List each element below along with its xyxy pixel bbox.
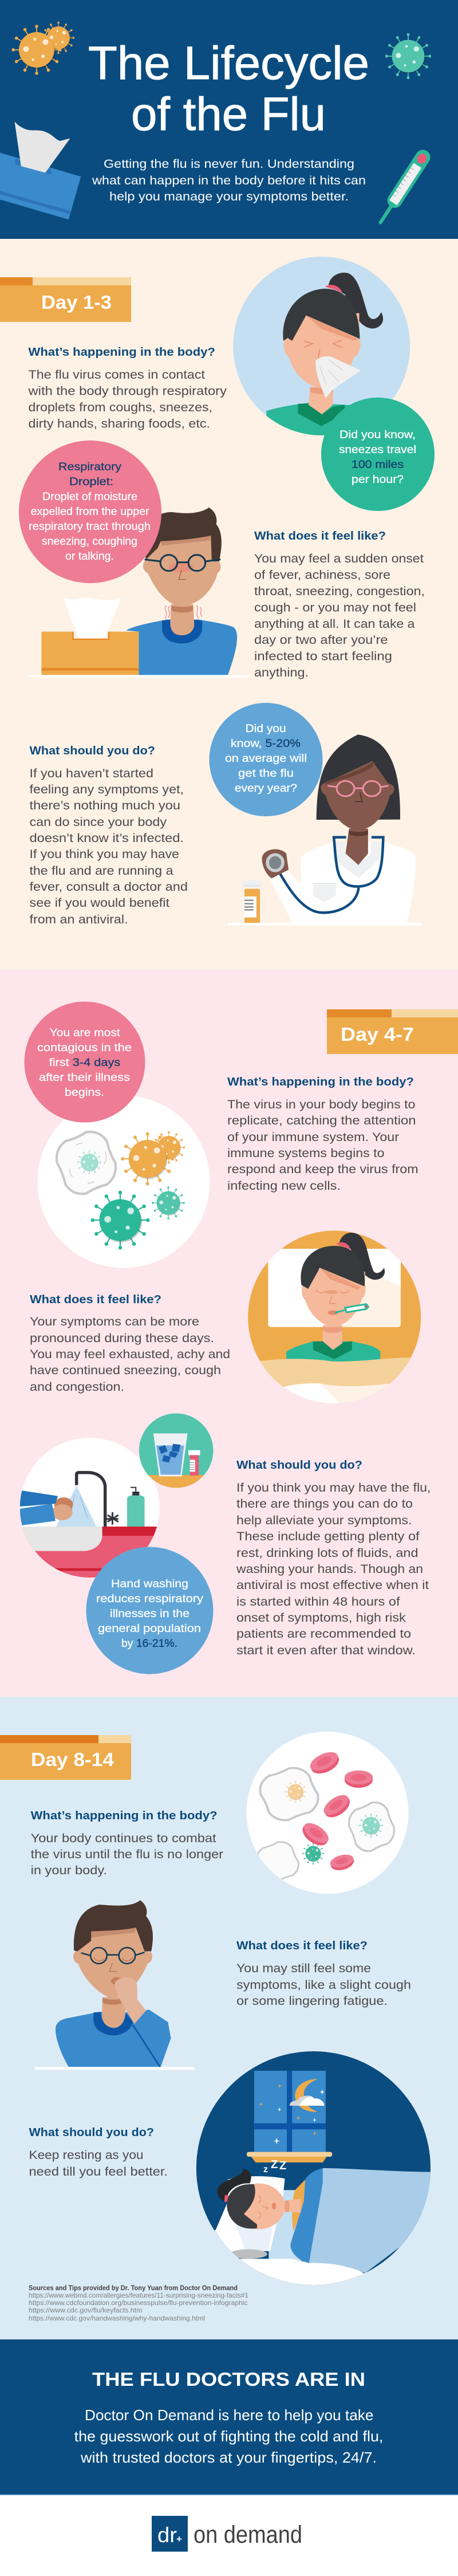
body text: what's happening, day 4-7: The virus in your body begins to [227, 1098, 416, 1111]
body text: what should you do, day 1-3: from an antiviral. [30, 913, 128, 926]
title [88, 37, 369, 140]
body text: what's happening, day 1-3: dirty hands, sharing foods, etc. [29, 418, 210, 431]
body text: what does it feel like, day 4-7: and congestion. [30, 1381, 124, 1394]
body text: what's happening, day 1-3: droplets from coughs, sneezes, [29, 401, 212, 414]
body text: what should you do, day 4-7: help alleviate your symptoms. [236, 1514, 412, 1527]
icon: thermometer [373, 147, 433, 228]
body text: what does it feel like, day 4-7: have continued sneezing, cough [30, 1364, 221, 1377]
illustration: woman sneezing [233, 257, 410, 447]
body text: what should you do, day 1-3: can do since your body [30, 816, 167, 829]
callout: sneezes: sneezes travel [339, 444, 416, 456]
body text: what does it feel like, day 1-3 [254, 552, 425, 679]
body text: what does it feel like, day 1-3: infected to start feeling [254, 650, 392, 663]
body text: what's happening, day 1-3 [27, 368, 227, 431]
body text: what does it feel like, day 8-14: You may still feel some [236, 1962, 371, 1975]
body text: what does it feel like, day 4-7 [30, 1315, 230, 1394]
illustration: viruses in white circle [38, 1095, 210, 1268]
heading: what's happening, day 1-3: What’s happening in the body? [29, 345, 215, 359]
callout: hand washing statistic: illnesses in the [110, 1608, 189, 1620]
sources: https://www.cdc.gov/flu/keyfacts.htm [29, 2306, 142, 2314]
body text: what does it feel like, day 1-3: of fever, achiness, sore [254, 569, 390, 582]
body text: what does it feel like, day 8-14: or some lingering fatigue. [236, 1995, 388, 2008]
callout: most contagious: contagious in the [37, 1042, 132, 1054]
body text: what should you do, day 8-14 [29, 2149, 168, 2178]
illustration: blood cells [246, 1732, 409, 1894]
heading: what does it feel like, day 8-14: What does it feel like? [236, 1939, 368, 1952]
body text: what should you do, day 4-7: start it even after that window. [236, 1644, 416, 1657]
body text: what should you do, day 1-3: If you think you may have [30, 848, 179, 861]
callout: respiratory droplet: sneezing, coughing [42, 536, 137, 548]
illustration: doctor [228, 734, 421, 926]
callout: most contagious [24, 1001, 145, 1123]
callout: respiratory droplet: Respiratory [58, 461, 122, 473]
body text: what's happening, day 4-7: of your immune system. Your [227, 1131, 399, 1144]
illustration: hand washing [18, 1438, 161, 1578]
body text: what's happening, day 4-7: replicate, catching the attention [227, 1114, 416, 1127]
body text: what's happening, day 8-14: Your body continues to combat [31, 1832, 216, 1845]
body text: what should you do, day 4-7: onset of symptoms, high risk [236, 1611, 406, 1625]
body text: call to action: Doctor On Demand is here to help you take [85, 2406, 373, 2424]
body text: what should you do, day 1-3: see if you would benefit [30, 896, 169, 910]
body text: what should you do, day 4-7: washing your hands. Though an [236, 1563, 423, 1576]
body text: what's happening, day 4-7: infecting new cells. [227, 1179, 341, 1193]
zzz snore text: Z [279, 2160, 286, 2172]
body text: what should you do, day 4-7: antiviral is most effective when it [236, 1579, 429, 1592]
body text: what's happening, day 1-3: The flu virus comes in contact [29, 368, 205, 382]
body text: what should you do, day 4-7: patients are recommended to [236, 1627, 411, 1641]
section background: day 8-14 [0, 1697, 458, 2339]
body text: what's happening, day 8-14 [31, 1832, 223, 1877]
callout: hand washing statistic: Hand washing [111, 1578, 188, 1590]
body text: what should you do, day 4-7: is started within 48 hours of [236, 1595, 400, 1608]
callout: respiratory droplet [19, 441, 161, 583]
body text: call to action: with trusted doctors at your fingertips, 24/7. [80, 2449, 377, 2466]
body text: what should you do, day 1-3: the flu and are running a [30, 864, 173, 878]
body text: what should you do, day 1-3: there’s nothing much you [30, 799, 180, 812]
day label: 1-3 [0, 277, 131, 322]
day label: 1-3: Day 1-3 [41, 292, 112, 313]
icon: orange virus [13, 23, 73, 73]
heading: what should you do, day 4-7: What should you do? [236, 1458, 362, 1472]
callout: flu statistic: know, 5-20% [231, 738, 301, 750]
body text: call to action [74, 2406, 383, 2466]
body text: what should you do, day 4-7: If you think you may have the flu, [236, 1481, 431, 1495]
body text: what does it feel like, day 1-3: anything. [254, 666, 309, 679]
intro text [92, 158, 366, 203]
intro text: Getting the flu is never fun. Understanding [104, 158, 354, 171]
body text: what should you do, day 8-14: need till you feel better. [29, 2165, 168, 2178]
body text: what's happening, day 4-7: respond and keep the virus from [227, 1163, 418, 1176]
day label: 4-7 [327, 1009, 458, 1054]
intro text: what can happen in the body before it hits can [92, 174, 366, 187]
callout: respiratory droplet: Droplet of moisture [42, 491, 137, 503]
body text: what should you do, day 1-3: doesn’t know it’s infected. [30, 832, 184, 845]
body text: what does it feel like, day 1-3: day or two after you’re [254, 634, 388, 647]
callout: most contagious: You are most [50, 1027, 120, 1039]
body text: what should you do, day 4-7: there are things you can do to [236, 1497, 413, 1511]
body text: what's happening, day 4-7: immune systems begins to [227, 1147, 385, 1160]
body text: what does it feel like, day 1-3: anything at all. It can take a [254, 618, 415, 631]
sources: https://www.cdc.gov/handwashing/why-handwashing.html [29, 2314, 205, 2322]
body text: what does it feel like, day 8-14: symptoms, like a slight cough [236, 1979, 411, 1992]
body text: what's happening, day 8-14: the virus until the flu is no longer [31, 1848, 223, 1861]
callout: hand washing statistic [86, 1547, 213, 1674]
body text: what does it feel like, day 4-7: pronounced during these days. [30, 1332, 214, 1345]
heading: what's happening, day 4-7: What’s happening in the body? [227, 1075, 414, 1088]
day label: 8-14: Day 8-14 [31, 1749, 114, 1770]
day label: 4-7: Day 4-7 [341, 1024, 414, 1045]
body text: call to action: the guesswork out of fighting the cold and flu, [74, 2428, 383, 2445]
heading: what should you do, day 8-14: What should you do? [29, 2126, 154, 2139]
icon: tissue box [0, 121, 81, 219]
callout: hand washing statistic: reduces respiratory [96, 1593, 204, 1605]
callout: flu statistic: on average will [225, 753, 307, 765]
sources: Sources and Tips provided by Dr. Tony Yuan from Doctor On Demand [29, 2284, 238, 2292]
section background: call to action [0, 2339, 458, 2495]
body text: what does it feel like, day 4-7: Your symptoms can be more [30, 1315, 199, 1328]
zzz snore text: Z [271, 2158, 278, 2171]
body text: what should you do, day 8-14: Keep resting as you [29, 2149, 143, 2162]
heading: what does it feel like, day 1-3: What does it feel like? [254, 529, 386, 542]
logo [152, 2516, 302, 2551]
logo: dr [157, 2523, 177, 2547]
callout: hand washing statistic: by 16-21%. [121, 1638, 177, 1650]
illustration: water and medicine [137, 1413, 216, 1489]
body text: what does it feel like, day 1-3: cough - or you may not feel [254, 601, 416, 615]
body text: what should you do, day 1-3: fever, consult a doctor and [30, 880, 188, 894]
body text: what should you do, day 4-7: rest, drinking lots of fluids, and [236, 1547, 418, 1560]
illustration: sick woman in bed [248, 1230, 421, 1411]
callout: hand washing statistic: general population [98, 1623, 201, 1635]
callout: flu statistic [210, 703, 323, 816]
body text: what does it feel like, day 1-3: You may feel a sudden onset [254, 552, 424, 565]
intro text: help you manage your symptoms better. [109, 190, 349, 203]
callout: respiratory droplet: or talking. [65, 550, 114, 563]
logo: + [176, 2534, 182, 2544]
logo: on demand [194, 2521, 302, 2549]
illustration: man with tissue box [28, 508, 249, 678]
icon: teal virus [386, 34, 430, 78]
illustration: thinking man [34, 1900, 195, 2070]
zzz snore text: z [263, 2165, 268, 2174]
callout: sneezes [321, 398, 435, 511]
body text: what should you do, day 1-3 [30, 767, 188, 926]
body text: what does it feel like, day 1-3: throat, sneezing, congestion, [254, 585, 425, 598]
title: The Lifecycle [88, 37, 369, 89]
day label: 8-14 [0, 1735, 131, 1780]
body text: what's happening, day 8-14: in your body. [31, 1864, 107, 1877]
section background: day 4-7 [0, 970, 458, 1697]
callout: respiratory droplet: respiratory tract through [29, 521, 151, 533]
heading: what should you do, day 1-3: What should you do? [30, 744, 155, 757]
callout: flu statistic: every year? [235, 782, 297, 795]
sources: https://www.webmd.com/allergies/features/11-surprising-sneezing-facts#1 [29, 2291, 248, 2299]
illustration: woman sleeping at night [196, 2051, 432, 2291]
heading: the flu doctors are in: THE FLU DOCTORS ARE IN [92, 2369, 365, 2390]
body text: what's happening, day 4-7 [227, 1098, 418, 1193]
callout: most contagious: first 3-4 days [49, 1057, 120, 1069]
body text: what should you do, day 4-7 [236, 1481, 431, 1657]
body text: what does it feel like, day 8-14 [236, 1962, 411, 2008]
body text: what does it feel like, day 4-7: You may feel exhausted, achy and [30, 1348, 230, 1361]
section background: footer [0, 2495, 458, 2576]
heading: what does it feel like, day 4-7: What does it feel like? [30, 1293, 161, 1306]
body text: what should you do, day 1-3: If you haven’t started [30, 767, 153, 780]
callout: most contagious: after their illness [39, 1072, 130, 1084]
callout: sneezes: Did you know, [339, 429, 416, 441]
body text: what should you do, day 1-3: feeling any symptoms yet, [30, 783, 184, 796]
section background: header [0, 0, 458, 239]
body text: what's happening, day 1-3: with the body through respiratory [27, 385, 227, 398]
title: of the Flu [131, 88, 326, 140]
sources [29, 2284, 248, 2322]
callout: flu statistic: Did you [246, 723, 286, 735]
zzz snore text [263, 2158, 286, 2174]
sources: https://www.cdcfoundation.org/businesspulse/flu-prevention-infographic [29, 2299, 248, 2307]
heading: what's happening, day 8-14: What’s happening in the body? [31, 1809, 218, 1822]
callout: most contagious: begins. [65, 1087, 104, 1099]
callout: sneezes: 100 miles [352, 459, 404, 471]
callout: flu statistic: get the flu [238, 768, 294, 780]
callout: respiratory droplet: Droplet: [69, 476, 113, 488]
callout: sneezes: per hour? [352, 474, 404, 486]
section background: day 1-3 [0, 239, 458, 970]
callout: respiratory droplet: expelled from the upper [31, 506, 149, 518]
body text: what should you do, day 4-7: These include getting plenty of [236, 1530, 420, 1543]
